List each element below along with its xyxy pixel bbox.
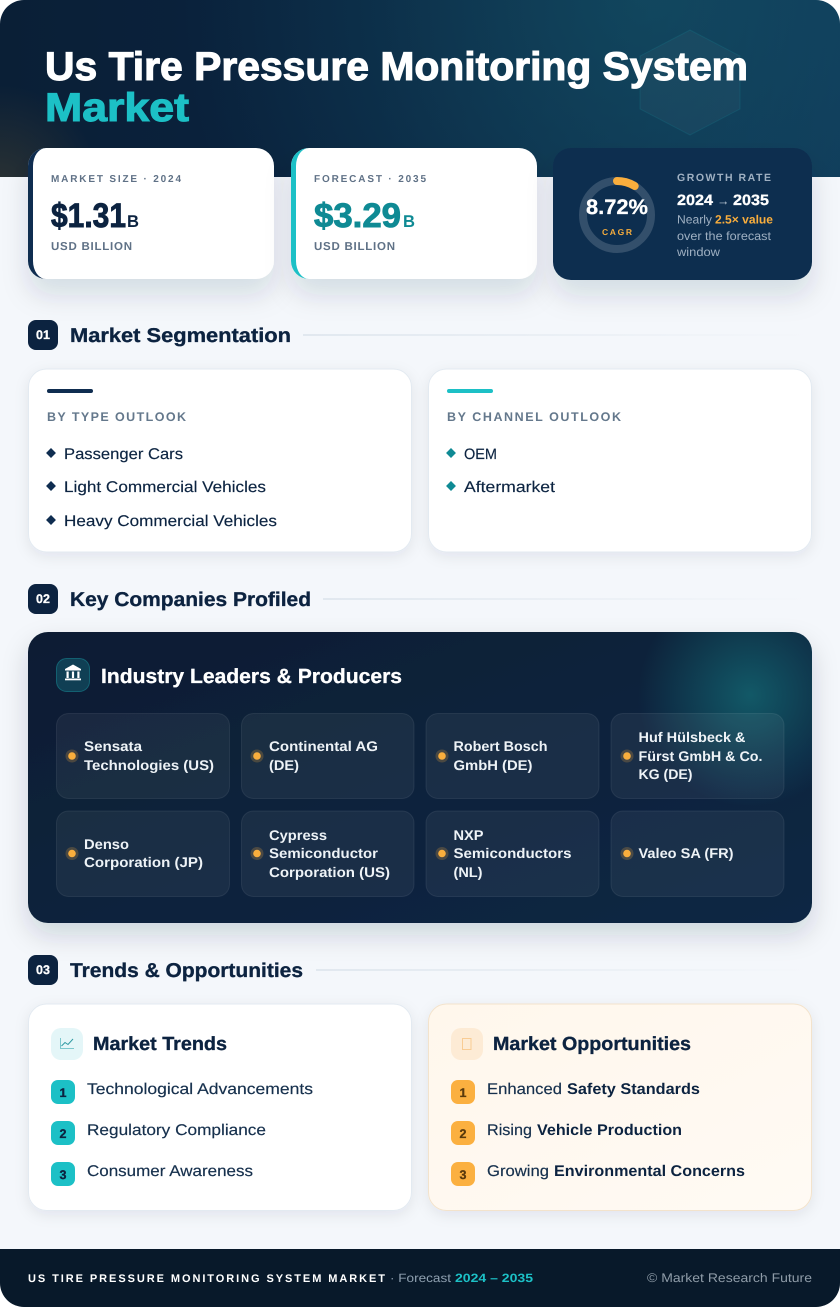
heading: 01 market segmentation: Market Segmentation <box>70 325 291 347</box>
panel: by type outlook <box>28 369 412 552</box>
heading: 01 market segmentation: 01 <box>36 328 50 342</box>
list: type items: Passenger Cars <box>64 446 183 463</box>
footer: · Forecast <box>390 1271 452 1285</box>
panel: industry leaders <box>28 632 812 923</box>
company: Valeo: Valeo SA (FR) <box>638 845 734 861</box>
text block: growth rate detail: 2024 <box>677 192 714 209</box>
company: Valeo <box>611 811 784 896</box>
list: opportunities: Growing <box>487 1163 549 1180</box>
text block: growth rate detail: Nearly <box>677 212 712 226</box>
company: Continental <box>242 714 414 798</box>
list: opportunities: 2 <box>460 1127 467 1141</box>
list: opportunities: Environmental Concerns <box>554 1163 745 1180</box>
panel: market size 2024: MARKET SIZE · 2024 <box>51 174 181 185</box>
company: NXP: (NL) <box>454 864 482 880</box>
panel: forecast 2035: $3.29 <box>314 197 401 235</box>
panel: market size 2024: USD BILLION <box>51 241 132 253</box>
text block: growth rate detail <box>676 172 773 259</box>
chart: CAGR ring: 8.72% <box>586 196 648 219</box>
title <box>45 45 748 130</box>
panel: forecast 2035: B <box>403 212 415 231</box>
text block: growth rate detail: 2035 <box>733 192 769 209</box>
footer: US TIRE PRESSURE MONITORING SYSTEM MARKET <box>28 1273 385 1285</box>
company: Denso: Denso <box>84 836 129 852</box>
list: opportunities: Safety Standards <box>567 1081 700 1098</box>
list: channel items: OEM <box>464 446 497 463</box>
text block: growth rate detail: → <box>717 194 730 208</box>
panel: market opportunities <box>428 1004 812 1210</box>
list: trends <box>51 1080 313 1186</box>
panel: forecast 2035 <box>291 148 537 279</box>
list: type items: Heavy Commercial Vehicles <box>64 513 277 530</box>
heading: 02 key companies <box>28 584 812 614</box>
footer: © Market Research Future <box>647 1271 812 1285</box>
company: Denso: Corporation (JP) <box>84 854 203 870</box>
list: opportunities: Enhanced <box>487 1081 562 1098</box>
text block: growth rate detail: GROWTH RATE <box>677 172 771 184</box>
text block: growth rate detail: window <box>676 245 720 259</box>
company: Continental: (DE) <box>269 757 299 773</box>
icon: line chart <box>51 1028 83 1060</box>
list: opportunities: 1 <box>460 1086 467 1100</box>
heading: 03 trends and opportunities <box>28 955 812 985</box>
panel: market trends <box>28 1004 412 1210</box>
company: Cypress: Corporation (US) <box>269 864 390 880</box>
company: Sensata: Technologies (US) <box>84 757 214 773</box>
footer: 2024 – 2035 <box>455 1271 533 1285</box>
company: NXP: NXP <box>454 827 484 843</box>
text block: growth rate detail: 2.5× value <box>715 212 773 226</box>
list: channel items <box>446 446 556 496</box>
panel: market size 2024: B <box>127 212 139 231</box>
list: trends: Technological Advancements <box>87 1081 313 1098</box>
heading: 01 market segmentation <box>28 320 812 350</box>
company: Cypress: Cypress <box>269 827 327 843</box>
list: trends: 2 <box>60 1127 67 1141</box>
company: Cypress: Semiconductor <box>269 845 379 861</box>
panel: market size 2024 <box>28 148 274 279</box>
list: trends: Regulatory Compliance <box>87 1122 266 1139</box>
title: Market <box>45 86 189 130</box>
list: opportunities: Vehicle Production <box>537 1122 682 1139</box>
heading: industry leaders: Industry Leaders & Producers <box>101 665 402 688</box>
panel: market opportunities: Market Opportunities <box>493 1034 691 1055</box>
company: Cypress <box>242 811 414 896</box>
company: Sensata <box>56 714 230 798</box>
icon: placeholder glyph <box>451 1028 483 1060</box>
list: trends: 1 <box>60 1086 67 1100</box>
list: type items: Light Commercial Vehicles <box>64 479 266 496</box>
panel: growth rate <box>553 148 812 280</box>
chart: CAGR ring <box>583 181 651 249</box>
panel: by channel outlook: BY CHANNEL OUTLOOK <box>447 410 621 424</box>
panel: market size 2024: $1.31 <box>51 197 126 235</box>
text block: growth rate detail: over the forecast <box>677 229 772 243</box>
company: Huf <box>611 714 784 798</box>
panel: market trends: Market Trends <box>93 1034 227 1055</box>
company: Bosch <box>426 714 599 798</box>
company: Huf: Huf Hülsbeck & <box>638 729 746 745</box>
heading: 02 key companies: Key Companies Profiled <box>70 589 311 611</box>
list: opportunities <box>451 1080 745 1186</box>
company: Bosch: Robert Bosch <box>454 738 548 754</box>
list: type items <box>46 446 277 530</box>
title: Us Tire Pressure Monitoring System <box>45 45 748 89</box>
company: NXP <box>426 811 599 896</box>
panel: by type outlook: BY TYPE OUTLOOK <box>47 410 186 424</box>
list: trends: 3 <box>60 1168 67 1182</box>
header banner <box>0 0 840 177</box>
company: Denso <box>56 811 230 896</box>
heading: 02 key companies: 02 <box>36 592 50 606</box>
footer <box>0 1249 840 1307</box>
heading: 03 trends and opportunities: Trends & Opportunities <box>70 960 303 982</box>
panel: forecast 2035: USD BILLION <box>314 241 395 253</box>
chart: CAGR ring: CAGR <box>602 227 632 237</box>
company: Huf: KG (DE) <box>638 766 692 782</box>
company: Continental: Continental AG <box>269 738 378 754</box>
icon: decorative hexagon <box>640 30 740 135</box>
icon: institution <box>56 658 90 692</box>
company: Huf: Fürst GmbH & Co. <box>638 748 762 764</box>
panel: by channel outlook <box>428 369 812 552</box>
list: trends: Consumer Awareness <box>87 1163 253 1180</box>
list: opportunities: Rising <box>487 1122 532 1139</box>
company: NXP: Semiconductors <box>454 845 572 861</box>
company: Bosch: GmbH (DE) <box>454 757 532 773</box>
heading: 03 trends and opportunities: 03 <box>36 963 50 977</box>
list: opportunities: 3 <box>460 1168 467 1182</box>
panel: forecast 2035: FORECAST · 2035 <box>314 174 426 185</box>
company: Sensata: Sensata <box>84 738 142 754</box>
list: channel items: Aftermarket <box>464 479 556 496</box>
